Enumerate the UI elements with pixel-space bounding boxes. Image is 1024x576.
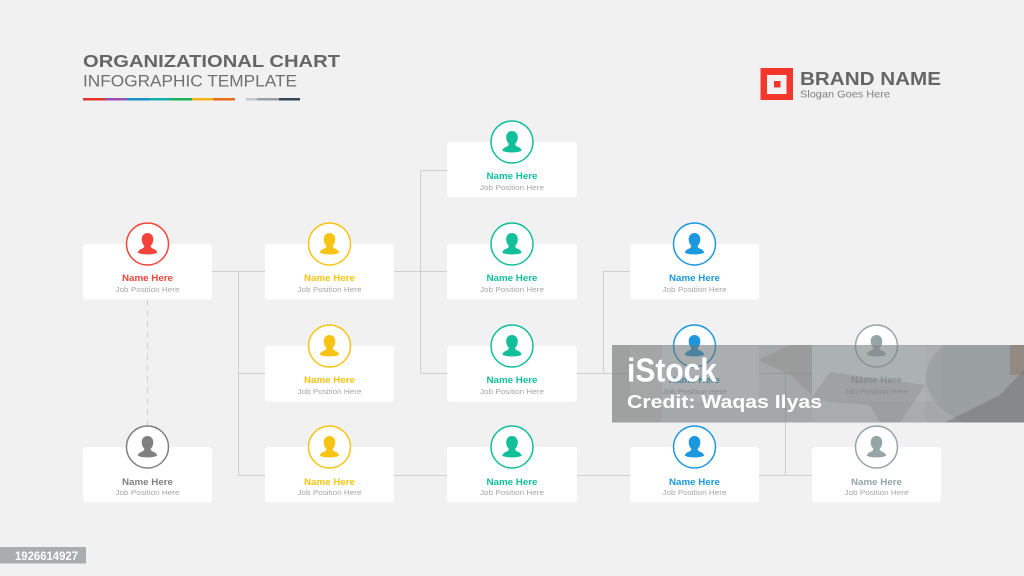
card: blue row 1: Name Here (669, 273, 720, 283)
card: blue row 1 (630, 223, 759, 300)
card: blue row 3: Job Position Here (662, 488, 726, 497)
card: green row 2 (447, 325, 577, 402)
brand name: BRAND NAME (800, 68, 941, 89)
card: grey assistant (83, 426, 212, 502)
subtitle: INFOGRAPHIC TEMPLATE (83, 73, 297, 91)
iStock wordmark: iStock (627, 352, 718, 388)
card: yellow row 2: Name Here (304, 375, 355, 385)
title block (83, 51, 340, 100)
card: green row 2: Name Here (486, 375, 538, 385)
card: green row 1 (447, 223, 577, 300)
card: red top manager (83, 223, 212, 300)
colour bar (83, 98, 235, 100)
card: slate row 2: Name Here (851, 375, 902, 385)
image id tag: 1926614927 (15, 549, 78, 563)
card: yellow row 1 (265, 223, 394, 300)
title: ORGANIZATIONAL CHART (83, 51, 340, 71)
card: green row 2: Job Position Here (480, 387, 544, 396)
card: green row 1: Name Here (486, 273, 538, 283)
card: blue row 2: Name Here (669, 375, 720, 385)
card: yellow row 2 (265, 325, 394, 402)
card: red top manager: Name Here (122, 273, 173, 283)
card: blue row 1: Job Position Here (662, 285, 726, 294)
card: green row 3 (447, 426, 577, 502)
card: green row 3: Job Position Here (480, 488, 544, 497)
card: yellow row 3 (265, 426, 394, 502)
banner background (612, 345, 1024, 422)
card: green top: Name Here (486, 171, 538, 181)
card: green row 3: Name Here (486, 477, 538, 487)
connector lines (148, 170, 812, 476)
card: blue row 2: Job Position Here (662, 387, 726, 396)
card: yellow row 1: Name Here (304, 273, 355, 283)
card: blue row 3: Name Here (669, 477, 720, 487)
watermark banner (612, 345, 1024, 422)
card: yellow row 3: Job Position Here (298, 488, 362, 497)
card: red top manager: Job Position Here (116, 285, 180, 294)
card: green row 1: Job Position Here (480, 285, 544, 294)
card: blue row 2 (630, 325, 759, 402)
card: slate row 2 (812, 325, 941, 402)
grey bar (246, 98, 300, 100)
card: yellow row 1: Job Position Here (298, 285, 362, 294)
credit text: Credit: Waqas Ilyas (627, 392, 822, 412)
card: green top: Job Position Here (480, 183, 544, 192)
card: yellow row 3: Name Here (304, 477, 355, 487)
icon: brand square (760, 68, 793, 100)
card: slate row 2: Job Position Here (844, 387, 908, 396)
image id tag (0, 547, 86, 564)
card: slate row 3 (812, 426, 941, 502)
card: yellow row 2: Job Position Here (298, 387, 362, 396)
card: green top (447, 121, 577, 198)
card: slate row 3: Name Here (851, 477, 902, 487)
card: grey assistant: Name Here (122, 477, 173, 487)
card: slate row 3: Job Position Here (844, 488, 908, 497)
card: blue row 3 (630, 426, 759, 502)
brand logo (760, 68, 941, 100)
slogan: Slogan Goes Here (800, 88, 890, 100)
card: grey assistant: Job Position Here (116, 488, 180, 497)
